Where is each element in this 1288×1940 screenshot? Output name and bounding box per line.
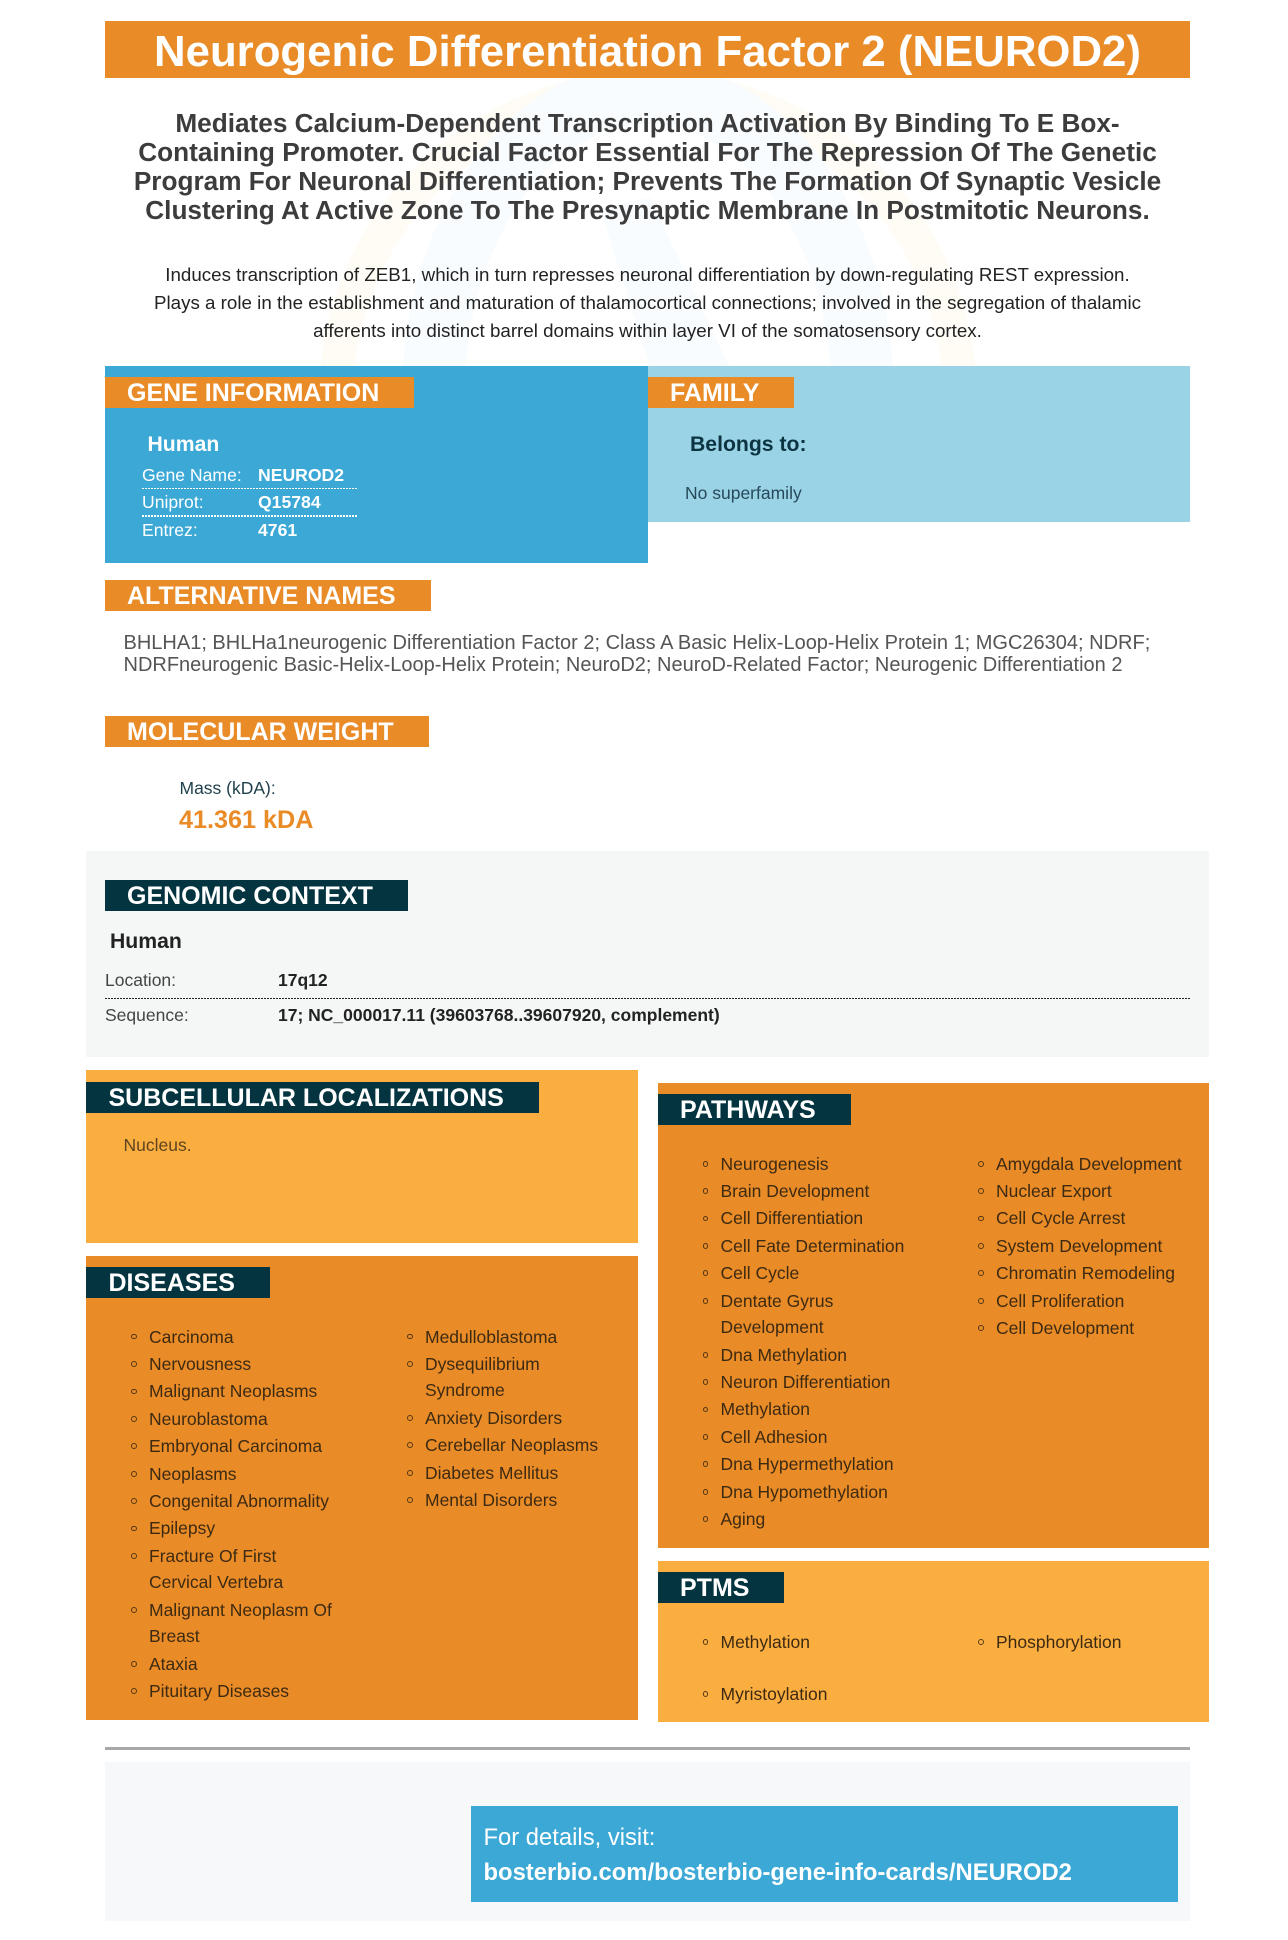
list: diseases column 2 — [407, 1326, 598, 1510]
panel: footer — [105, 1762, 1190, 1921]
gene info table: NEUROD2 — [258, 465, 344, 485]
list: pathways column 1 — [703, 1154, 904, 1529]
heading: molecular weight: MOLECULAR WEIGHT — [127, 718, 394, 746]
list: pathways column 1: Brain Development — [720, 1181, 869, 1201]
location row: 17q12 — [278, 970, 328, 990]
list: pathways column 1: Methylation — [720, 1399, 810, 1419]
list: diseases column 1: Cervical Vertebra — [149, 1572, 283, 1592]
list: diseases column 1: Congenital Abnormality — [149, 1491, 329, 1511]
heading: diseases: DISEASES — [108, 1269, 235, 1297]
list: pathways column 2: Cell Cycle Arrest — [996, 1208, 1125, 1228]
list: diseases column 2: Medulloblastoma — [425, 1326, 557, 1346]
list: diseases column 1 — [131, 1326, 332, 1701]
species label: Human — [148, 432, 219, 456]
list: diseases column 1: Fracture Of First — [149, 1546, 276, 1566]
list: ptms column 1 — [703, 1632, 827, 1704]
description paragraph: Plays a role in the establishment and maturation of thalamocortical connections; involved in the segregation of thalamic — [154, 292, 1141, 313]
list: pathways column 2: System Development — [996, 1236, 1162, 1256]
list: diseases column 2: Mental Disorders — [425, 1490, 557, 1510]
list: diseases column 1: Carcinoma — [149, 1326, 234, 1346]
species label: Human — [110, 930, 182, 952]
list: diseases column 2: Cerebellar Neoplasms — [425, 1435, 598, 1455]
alternative names text: BHLHA1; BHLHa1neurogenic Differentiation Factor 2; Class A Basic Helix-Loop-Helix Protein 1; MGC26304; NDRF; — [124, 632, 1150, 654]
list: ptms column 1: Methylation — [720, 1632, 810, 1652]
list: diseases column 2: Dysequilibrium — [425, 1354, 540, 1374]
list: pathways column 2: Chromatin Remodeling — [996, 1263, 1175, 1283]
list: pathways column 1: Cell Cycle — [720, 1263, 799, 1283]
list: diseases column 1: Malignant Neoplasm Of — [149, 1600, 332, 1620]
heading: gene information: GENE INFORMATION — [127, 379, 379, 407]
heading: ptms: PTMS — [680, 1574, 749, 1602]
heading: pathways — [658, 1094, 851, 1125]
heading: subcellular localizations: SUBCELLULAR LOCALIZATIONS — [108, 1084, 504, 1112]
list: diseases column 1: Embryonal Carcinoma — [149, 1436, 322, 1456]
gene info table: 4761 — [258, 520, 297, 540]
callout label: For details, visit: — [484, 1824, 655, 1851]
list: pathways column 1: Cell Differentiation — [720, 1208, 863, 1228]
list: pathways column 1: Dentate Gyrus — [720, 1291, 833, 1311]
list: pathways column 2: Nuclear Export — [996, 1181, 1112, 1201]
panel: gene information — [105, 366, 648, 563]
panel: diseases — [86, 1256, 638, 1720]
list: diseases column 1: Ataxia — [149, 1654, 198, 1674]
family value: No superfamily — [685, 482, 802, 502]
heading: genomic context: GENOMIC CONTEXT — [127, 882, 373, 910]
list: pathways column 1: Dna Methylation — [720, 1345, 847, 1365]
watermark logo — [321, 82, 975, 366]
localization text: Nucleus. — [124, 1135, 192, 1155]
location row — [105, 970, 328, 990]
panel: pathways — [658, 1083, 1209, 1548]
gene info table: Q15784 — [258, 492, 321, 512]
list: pathways column 2: Cell Development — [996, 1318, 1134, 1338]
list: pathways column 1: Development — [720, 1317, 824, 1337]
heading: family — [648, 377, 794, 408]
mass value: 41.361 kDA — [179, 806, 313, 834]
list: pathways column 1: Neuron Differentiation — [720, 1372, 890, 1392]
description paragraph: afferents into distinct barrel domains within layer VI of the somatosensory cortex. — [313, 320, 982, 341]
list: ptms column 2: Phosphorylation — [996, 1632, 1122, 1652]
list: pathways column 2: Amygdala Development — [996, 1154, 1182, 1174]
location row: Location: — [105, 970, 176, 990]
gene info table: Gene Name: — [142, 465, 242, 485]
list: diseases column 2: Diabetes Mellitus — [425, 1463, 558, 1483]
list: pathways column 1: Cell Fate Determination — [720, 1236, 904, 1256]
panel: subcellular localizations — [86, 1070, 638, 1243]
description paragraph — [154, 264, 1141, 341]
list: pathways column 1: Cell Adhesion — [720, 1427, 828, 1447]
panel: ptms — [658, 1561, 1209, 1722]
description paragraph: Induces transcription of ZEB1, which in turn represses neuronal differentiation by down-regulating REST expression. — [165, 264, 1130, 285]
alternative names text — [124, 632, 1150, 676]
panel: genomic context — [86, 851, 1209, 1057]
list: pathways column 1: Neurogenesis — [720, 1154, 828, 1174]
list: diseases column 2: Anxiety Disorders — [425, 1408, 562, 1428]
subtitle heading — [134, 108, 1161, 224]
subtitle heading: Containing Promoter. Crucial Factor Essential For The Repression Of The Genetic — [138, 136, 1157, 166]
heading: ptms — [658, 1572, 784, 1603]
list: diseases column 1: Nervousness — [149, 1354, 251, 1374]
list: diseases column 1: Malignant Neoplasms — [149, 1381, 317, 1401]
heading: pathways: PATHWAYS — [680, 1096, 816, 1124]
list: diseases column 1: Breast — [149, 1626, 200, 1646]
subtitle heading: Program For Neuronal Differentiation; Prevents The Formation Of Synaptic Vesicle — [134, 166, 1161, 196]
gene info table: Entrez: — [142, 520, 198, 540]
list: pathways column 1: Dna Hypermethylation — [720, 1454, 894, 1474]
callout: details link — [471, 1806, 1178, 1902]
sequence row: 17; NC_000017.11 (39603768..39607920, complement) — [278, 1005, 720, 1025]
list: pathways column 2 — [978, 1154, 1182, 1338]
subtitle heading: Mediates Calcium-Dependent Transcription Activation By Binding To E Box- — [175, 108, 1120, 138]
list: diseases column 1: Pituitary Diseases — [149, 1681, 289, 1701]
list: pathways column 1: Dna Hypomethylation — [720, 1482, 888, 1502]
list: diseases column 1: Epilepsy — [149, 1518, 215, 1538]
mass label: Mass (kDA): — [180, 778, 276, 798]
callout url: bosterbio.com/bosterbio-gene-info-cards/NEUROD2 — [484, 1859, 1072, 1886]
heading: family: FAMILY — [670, 379, 759, 407]
list: pathways column 1: Aging — [720, 1509, 765, 1529]
list: diseases column 2: Syndrome — [425, 1380, 505, 1400]
heading: alternative names: ALTERNATIVE NAMES — [127, 582, 396, 610]
alternative names text: NDRFneurogenic Basic-Helix-Loop-Helix Protein; NeuroD2; NeuroD-Related Factor; Neurogenic Differentiation 2 — [124, 654, 1122, 676]
belongs to label: Belongs to: — [690, 432, 807, 456]
subtitle heading: Clustering At Active Zone To The Presynaptic Membrane In Postmitotic Neurons. — [145, 194, 1150, 224]
gene info table — [142, 465, 357, 540]
list: pathways column 2: Cell Proliferation — [996, 1291, 1124, 1311]
list: diseases column 1: Neuroblastoma — [149, 1409, 268, 1429]
panel: family — [648, 366, 1190, 522]
list: ptms column 1: Myristoylation — [720, 1684, 827, 1704]
heading: diseases — [86, 1267, 270, 1298]
title banner: Neurogenic Differentiation Factor 2 (NEUROD2) — [154, 27, 1141, 76]
gene info table: Uniprot: — [142, 492, 204, 512]
sequence row: Sequence: — [105, 1005, 189, 1025]
list: diseases column 1: Neoplasms — [149, 1464, 237, 1484]
